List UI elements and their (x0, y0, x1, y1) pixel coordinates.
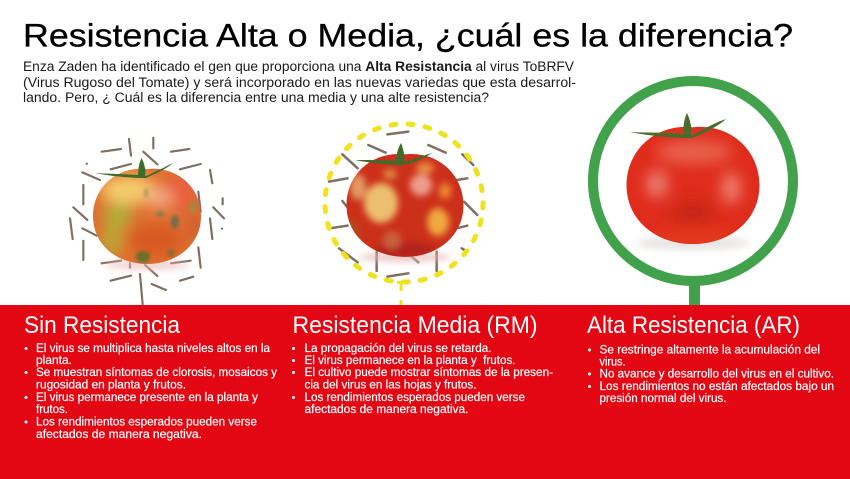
bullet list: Los rendimientos no están afectados bajo un (600, 379, 834, 393)
bullet list: Se restringe altamente la acumulación del (600, 342, 820, 356)
healthy tomato (626, 126, 760, 244)
calyx (95, 158, 173, 178)
bullet list (24, 341, 278, 441)
bullet list: virus. (600, 354, 626, 368)
intro paragraph (23, 59, 576, 105)
bullet list: No avance y desarrollo del virus en el cultivo. (600, 366, 834, 380)
heading: Sin Resistencia (24, 312, 181, 339)
yellow connector (397, 281, 405, 305)
calyx (355, 143, 432, 165)
intro paragraph: Enza Zaden ha identificado el gen que proporciona una Alta Resistancia al virus ToBRFV (23, 59, 574, 74)
bullet list: afectados de manera negativa. (304, 402, 468, 416)
bullet list: El cultivo puede mostrar síntomas de la presen- (304, 365, 553, 379)
tomato group: high resistance (593, 81, 793, 306)
intro paragraph: lando. Pero, ¿ Cuál es la diferencia entre una media y una alte resistencia? (23, 90, 489, 105)
bullet list: rugosidad en planta y frutos. (36, 378, 186, 392)
bullet list: El virus permanece en la planta y frutos. (304, 353, 516, 367)
panel: alta resistencia (587, 312, 834, 405)
tomato shadow (105, 260, 189, 270)
virus particles around tomato (70, 138, 224, 304)
panel: resistencia media (292, 312, 553, 416)
bullet list: Los rendimientos esperados pueden verse (304, 390, 525, 404)
bullet list: La propagación del virus se retarda. (304, 341, 492, 355)
bullet list: El virus se multiplica hasta niveles altos en la (36, 341, 270, 355)
bullet list: El virus permanece presente en la planta y (36, 390, 259, 404)
title: Resistencia Alta o Media, ¿cuál es la diferencia? (23, 18, 793, 54)
bullet list: afectados de manera negativa. (36, 427, 202, 441)
green ring (593, 81, 793, 281)
tomato shadow (359, 252, 451, 262)
diseased tomato (93, 168, 201, 264)
bullet list: frutos. (36, 402, 68, 416)
heading: Resistencia Media (RM) (292, 312, 538, 339)
green connector (689, 285, 700, 306)
bullet list (588, 342, 834, 405)
heading: Alta Resistencia (AR) (587, 312, 800, 339)
bullet list: planta. (36, 353, 72, 367)
bullet list: presión normal del virus. (600, 391, 726, 405)
tomato group: no resistance (70, 138, 224, 304)
virus particles around tomato (329, 132, 477, 277)
tomato group: medium resistance (325, 124, 483, 305)
bullet list: Los rendimientos esperados pueden verse (36, 414, 257, 428)
intro paragraph: (Virus Rugoso del Tomate) y será incorporado en las nuevas variedas que esta desarrol- (23, 75, 576, 90)
spotted tomato (346, 154, 464, 257)
bullet list: cia del virus en las hojas y frutos. (304, 378, 476, 392)
calyx (630, 113, 726, 138)
bullet list: Se muestran síntomas de clorosis, mosaicos y (36, 365, 278, 379)
tomato shadow (637, 236, 749, 250)
red band (0, 305, 850, 479)
bullet list (292, 341, 553, 416)
panel: sin resistencia (24, 312, 278, 441)
yellow dashed ring (325, 124, 483, 282)
